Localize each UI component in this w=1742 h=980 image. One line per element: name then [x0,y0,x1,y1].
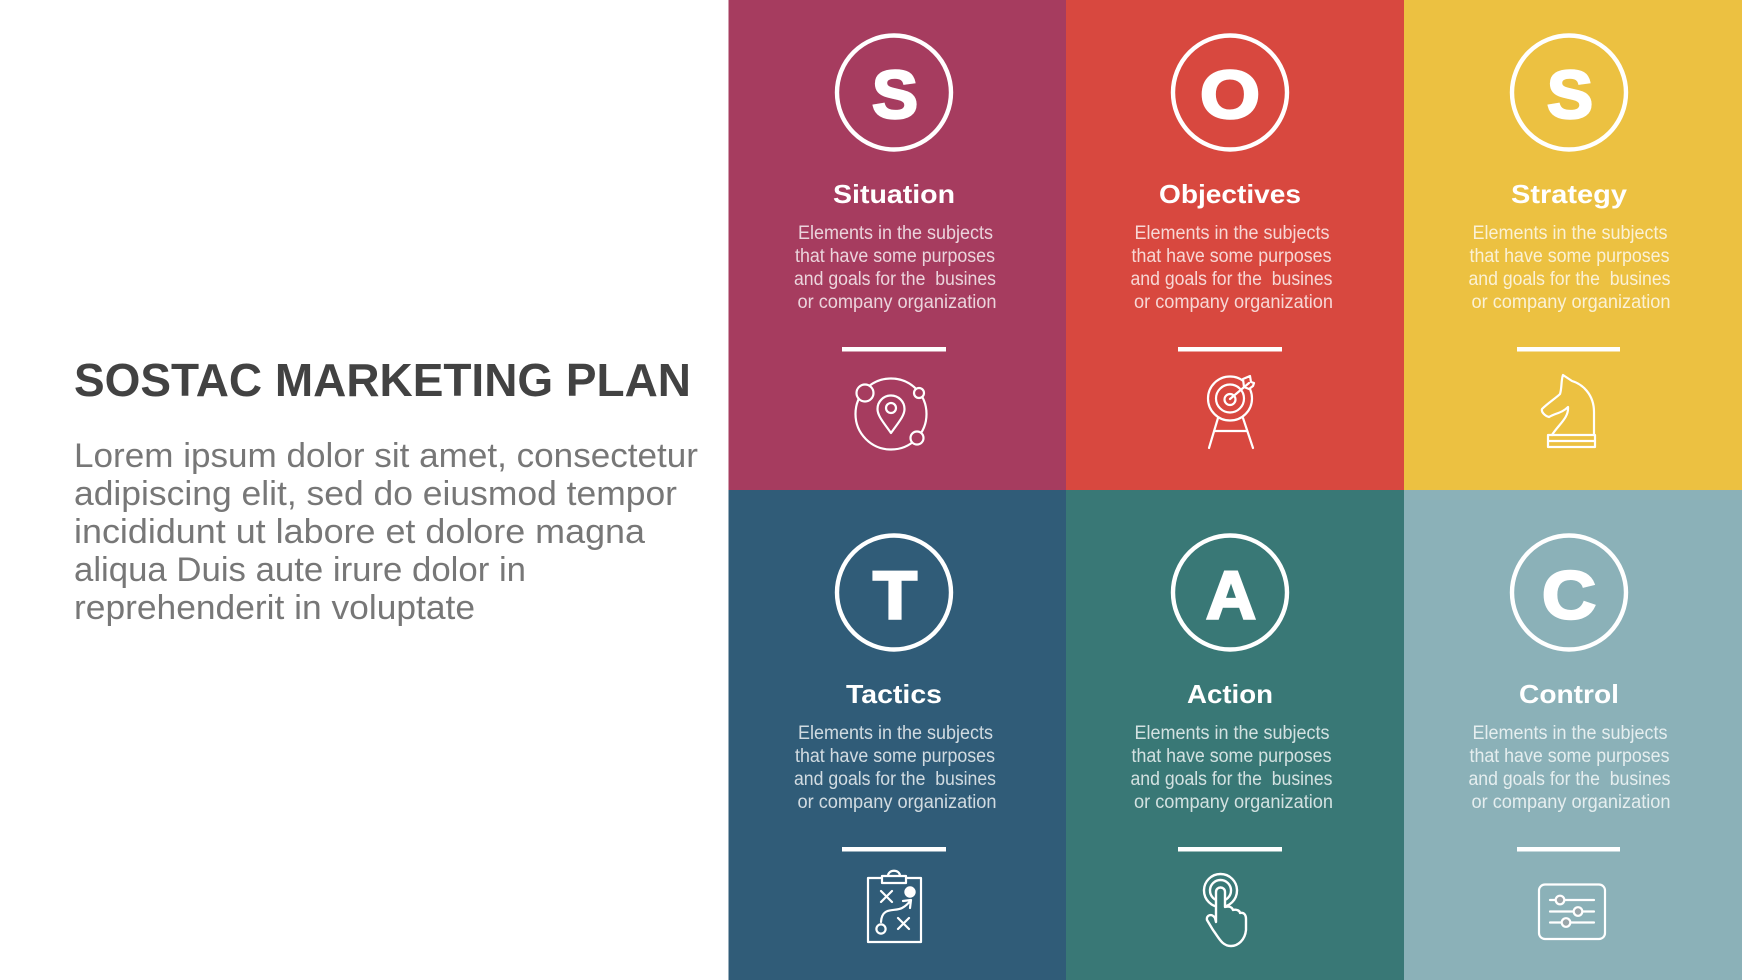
intro paragraph: aliqua Duis aute irure dolor in [74,551,526,589]
description: that have some purposes [1132,246,1332,267]
badge: A [1173,536,1287,650]
intro paragraph: reprehenderit in voluptate [74,589,475,627]
icon: hand tapping [1204,874,1246,946]
badge: C: C [1542,558,1596,634]
description: Elements in the subjects [1134,223,1330,244]
description: and goals for the busines [1468,769,1670,790]
description: and goals for the busines [794,269,996,290]
intro paragraph: incididunt ut labore et dolore magna [74,513,645,551]
badge: A: A [1206,558,1256,634]
description: Elements in the subjects [1472,223,1668,244]
panel: control [1404,490,1742,980]
panel: situation [728,0,1066,490]
intro paragraph [74,437,698,627]
description: and goals for the busines [1468,269,1670,290]
icon: sliders panel [1539,884,1605,939]
description: that have some purposes [1470,746,1670,767]
description: that have some purposes [1470,246,1670,267]
description: Elements in the subjects [798,723,993,744]
description [1130,223,1333,313]
panel: action [1066,490,1404,980]
description: or company organization [798,292,996,313]
badge: O [1173,36,1287,150]
icon: chess knight [1542,375,1595,447]
heading: Tactics: Tactics [846,679,942,709]
left intro block [74,354,698,627]
description [1468,723,1670,813]
panel: objectives [1066,0,1404,490]
description: that have some purposes [1132,746,1332,767]
heading: Objectives: Objectives [1159,179,1301,209]
description: or company organization [798,792,996,813]
description: Elements in the subjects [1134,723,1330,744]
description [1130,723,1333,813]
description: and goals for the busines [794,769,996,790]
heading: Action: Action [1187,679,1273,709]
icon: location orbit [856,378,926,450]
description: and goals for the busines [1130,269,1332,290]
badge: T: T [873,558,917,634]
heading: Control: Control [1519,679,1619,709]
badge: S: S [872,57,918,133]
panel: strategy [1404,0,1742,490]
intro paragraph: adipiscing elit, sed do eiusmod tempor [74,475,677,513]
badge: S: S [1547,57,1593,133]
badge: S [1512,36,1626,150]
badge: O: O [1200,57,1260,133]
badge: S [837,36,951,150]
description: that have some purposes [795,246,995,267]
description: and goals for the busines [1130,769,1332,790]
description: or company organization [1472,792,1670,813]
description [794,723,996,813]
heading: Situation: Situation [833,179,955,209]
icon: target with arrow [1208,376,1254,448]
description: Elements in the subjects [1472,723,1668,744]
intro paragraph: Lorem ipsum dolor sit amet, consectetur [74,437,698,475]
title: SOSTAC MARKETING PLAN [74,354,691,406]
panel: tactics [728,490,1066,980]
description: that have some purposes [795,746,995,767]
description: or company organization [1134,792,1333,813]
icon: tactics clipboard [868,871,921,942]
description: Elements in the subjects [798,223,993,244]
description [1468,223,1670,313]
badge: C [1512,536,1626,650]
description: or company organization [1472,292,1670,313]
description: or company organization [1134,292,1333,313]
description [794,223,996,313]
badge: T [837,536,951,650]
heading: Strategy: Strategy [1511,179,1628,209]
